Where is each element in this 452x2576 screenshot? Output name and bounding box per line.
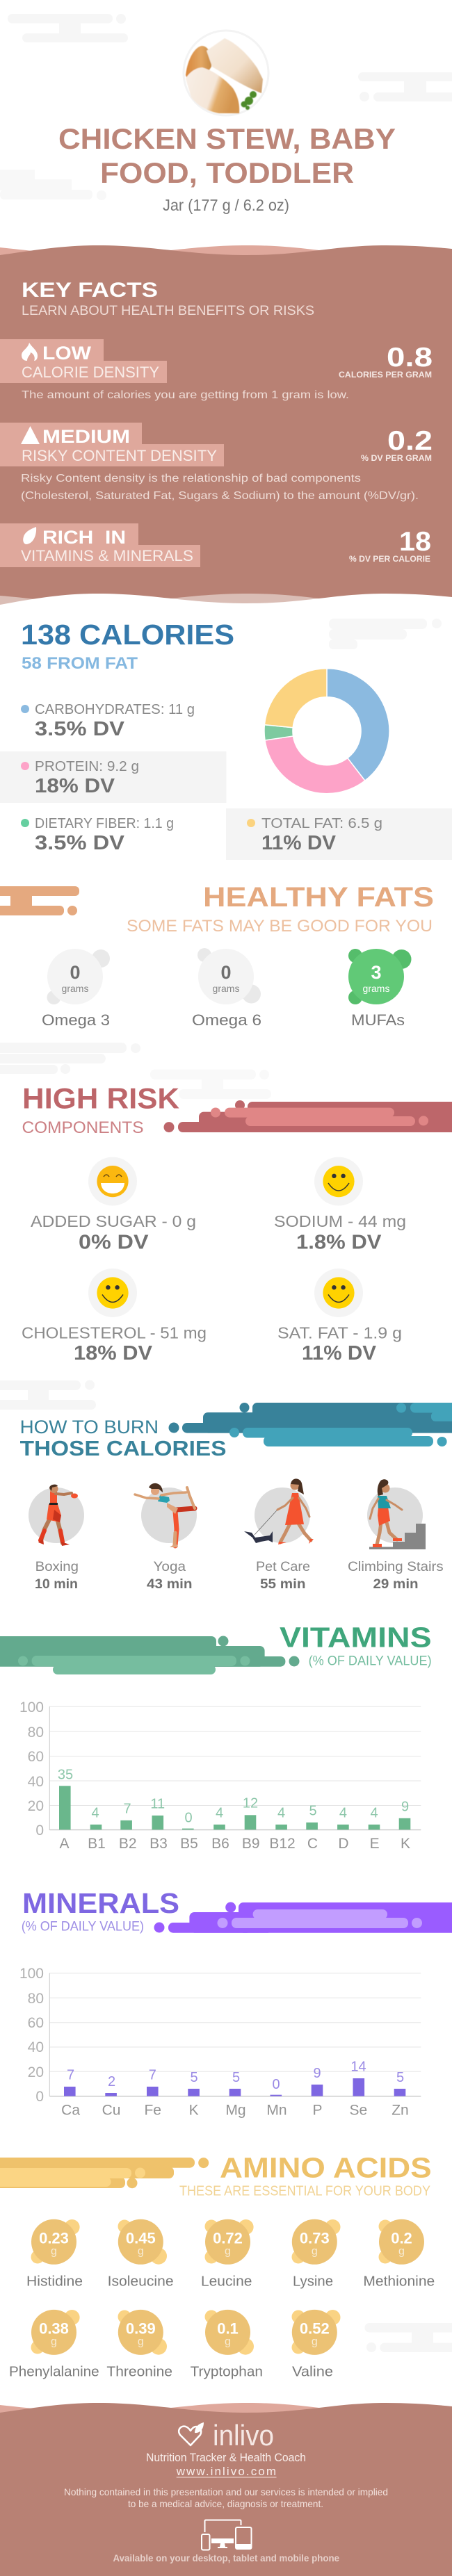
decorative band [168,1403,452,1446]
amino acids heading: AMINO ACIDS [220,2151,432,2183]
bar chart: vitamins: 5 [309,1803,317,1818]
healthy fats subheading: SOME FATS MAY BE GOOD FOR YOU [127,917,433,936]
amino: isoleucine: Isoleucine [108,2274,174,2289]
legend: carbohydrates: 3.5% DV [35,718,125,740]
disclaimer: Nothing contained in this presentation and our services is intended or implied [64,2486,388,2497]
tag: medium risky content density: RISKY CONTENT DENSITY [22,447,217,464]
activity: climbing stairs: Climbing Stairs [348,1560,444,1574]
bar chart: minerals: P [312,2103,323,2119]
stat: dv per calorie: 18 [399,527,431,557]
bar chart: minerals [19,1966,421,2119]
bar chart: minerals: 60 [28,2015,44,2031]
amino: isoleucine: 0.45 [126,2230,156,2247]
bar chart: vitamins: 4 [277,1806,285,1821]
decorative band [154,1902,452,1933]
tag: medium risky content density: MEDIUM [42,426,130,447]
bar chart: minerals: 0 [35,2089,44,2105]
bar chart: minerals: Mn [266,2103,287,2119]
icon: smiling face [97,1277,129,1309]
amino: leucine: 0.72 [213,2230,243,2247]
bar chart: vitamins: B12 [269,1836,296,1852]
title [58,122,396,189]
bar chart: minerals: 0 [272,2077,280,2092]
stat: calories per gram: CALORIES PER GRAM [339,370,432,380]
amino: valine: 0.52 [300,2320,330,2337]
bar chart: vitamins: 11 [150,1796,165,1811]
saturated fat [277,1269,402,1364]
icon: woman climbing stairs [369,1479,426,1549]
tag: rich in vitamins and minerals [0,523,200,567]
low density description: The amount of calories you are getting from 1 gram is low. [22,389,349,401]
bar chart: vitamins: 40 [28,1774,44,1790]
amino: threonine: g [138,2335,144,2347]
icon: yoga figure [135,1483,195,1547]
amino: methionine: g [398,2246,405,2258]
icon: woman walking dog [244,1478,314,1544]
amino: phenylalanine: Phenylalanine [9,2365,99,2380]
disclaimer [64,2486,388,2509]
amino: histidine [26,2219,83,2289]
bar chart: vitamins: 4 [216,1806,223,1821]
decorative band [0,1636,299,1674]
bar chart: vitamins: 80 [28,1725,44,1741]
bar chart: minerals: Se [350,2103,367,2119]
stat: calories per gram: 0.8 [387,343,433,373]
activity: yoga [135,1483,197,1592]
vitamins heading: VITAMINS [280,1621,432,1653]
bar chart: vitamins: C [307,1836,318,1852]
panel: key facts [0,245,452,615]
amino: tryptophan: Tryptophan [191,2365,263,2380]
added sugar: ADDED SUGAR - 0 g [31,1212,196,1230]
amino: leucine: g [225,2246,231,2258]
legend: dietary fiber: DIETARY FIBER: 1.1 g [35,816,174,831]
amino: valine: Valine [292,2365,333,2380]
amino: methionine [363,2219,435,2289]
omega 3: grams [62,983,88,994]
minerals subheading: (% OF DAILY VALUE) [22,1920,144,1934]
bar chart: vitamins: B6 [211,1836,229,1852]
bar chart: minerals: Ca [61,2103,80,2119]
bar chart: vitamins: 4 [339,1806,347,1821]
decorative band [0,886,79,915]
tag: low calorie density: LOW [42,343,92,364]
bar chart: vitamins: 7 [123,1801,131,1816]
website link: www.inlivo.com [176,2465,276,2478]
panel: amino acids [0,2151,435,2380]
sodium: SODIUM - 44 mg [274,1212,406,1230]
icon: smiling face [323,1277,355,1309]
parsley [241,91,257,110]
icon: boxer figure [38,1485,78,1546]
burn heading: HOW TO BURN [20,1417,159,1437]
burn heading: THOSE CALORIES [20,1436,226,1460]
components subheading: COMPONENTS [22,1118,143,1137]
key facts heading: KEY FACTS [22,279,158,302]
disclaimer: to be a medical advice, diagnosis or treatment. [128,2498,323,2509]
icon: leaf [23,527,36,544]
bar chart: vitamins: B9 [242,1836,260,1852]
logo: inlivo: inlivo [213,2419,274,2452]
amino: histidine: Histidine [26,2274,83,2289]
bar chart: minerals: 5 [190,2070,198,2085]
burn heading [20,1417,226,1460]
back chicken piece [186,46,211,81]
bar chart: vitamins: 12 [243,1796,258,1811]
stat: dv per gram: 0.2 [387,426,433,456]
serving size: Jar (177 g / 6.2 oz) [163,196,289,214]
bar chart: minerals: Mg [225,2103,246,2119]
stat: dv per gram: % DV PER GRAM [361,453,432,463]
bar chart: minerals: 100 [19,1966,44,1982]
legend: total fat [226,808,452,860]
bar chart: minerals: 40 [28,2039,44,2055]
amino: tryptophan [191,2310,263,2380]
bar chart: vitamins: 4 [91,1806,99,1821]
risky content description: (Cholesterol, Saturated Fat, Sugars & Sodium) to the amount (%DV/gr). [21,490,419,502]
legend: total fat: TOTAL FAT: 6.5 g [261,816,382,831]
amino: leucine [201,2219,254,2289]
legend: dietary fiber: 3.5% DV [35,832,125,854]
legend: protein [0,751,227,803]
added sugar [31,1157,196,1254]
amino: tryptophan: g [225,2335,231,2347]
amino: isoleucine: g [138,2246,144,2258]
mufas [348,949,412,1029]
amino: threonine [106,2310,172,2380]
omega 6: 0 [220,962,232,983]
stat: dv per gram [361,426,433,463]
amino: histidine: g [51,2246,57,2258]
panel: how to burn those calories [20,1403,452,1592]
sodium: 1.8% DV [296,1232,382,1254]
bar chart: vitamins [19,1699,421,1852]
amino: lysine: g [312,2246,318,2258]
availability note: Available on your desktop, tablet and mobile phone [113,2552,339,2563]
risky content description [21,473,419,502]
cholesterol [22,1269,207,1364]
bar chart: minerals: 5 [232,2070,240,2085]
minerals heading: MINERALS [22,1887,179,1919]
tag: rich in vitamins and minerals: RICH IN [42,527,126,548]
mufas: MUFAs [351,1011,405,1029]
amino: phenylalanine: g [51,2335,57,2347]
tag: low calorie density [0,339,167,383]
activity: yoga: Yoga [153,1560,186,1574]
mufas: 3 [371,962,382,983]
tag: rich in vitamins and minerals: VITAMINS & MINERALS [21,547,193,564]
activity: boxing: Boxing [35,1560,79,1574]
food photo: chicken pieces [184,31,268,115]
omega 6 [192,948,261,1029]
amino: isoleucine [108,2219,174,2289]
title: CHICKEN STEW, BABY [58,122,396,155]
activity: pet care [244,1478,314,1592]
bar chart: vitamins: B1 [88,1836,106,1852]
bar chart: vitamins: 35 [58,1767,73,1782]
saturated fat: SAT. FAT - 1.9 g [277,1323,402,1342]
sodium [274,1157,406,1254]
risky content description: Risky Content density is the relationship of bad components [21,473,361,484]
bar chart: vitamins: 0 [184,1810,193,1825]
bar chart: vitamins: 0 [35,1823,44,1839]
legend: dietary fiber [21,816,174,854]
key facts subheading: LEARN ABOUT HEALTH BENEFITS OR RISKS [22,304,314,318]
panel: healthy fats [0,882,434,1029]
amino: lysine [292,2219,341,2289]
bar chart: minerals: 80 [28,1991,44,2007]
omega 3 [42,949,110,1029]
saturated fat: 11% DV [302,1342,377,1364]
bar chart: minerals: 14 [350,2059,366,2074]
activity: climbing stairs [348,1479,444,1592]
panel: minerals [19,1887,452,2119]
amino: valine: g [312,2335,318,2347]
stat: dv per calorie [349,527,431,564]
bar chart: minerals: 20 [28,2064,44,2080]
activity: boxing [29,1485,84,1592]
stat: dv per calorie: % DV PER CALORIE [349,554,430,564]
panel: vitamins [0,1621,432,1852]
healthy fats heading: HEALTHY FATS [203,882,434,913]
amino: histidine: 0.23 [39,2230,69,2247]
bar chart: vitamins: B2 [119,1836,137,1852]
calories from fat: 58 FROM FAT [22,654,138,673]
amino: lysine: 0.73 [300,2230,330,2247]
activity: climbing stairs: 29 min [373,1577,419,1592]
logo: inlivo [179,2419,274,2452]
donut chart [264,669,389,794]
bar chart: vitamins: 9 [401,1799,409,1814]
stat: calories per gram [339,343,433,380]
amino: leucine: Leucine [201,2274,252,2289]
tag: low calorie density: CALORIE DENSITY [22,364,159,381]
amino: threonine: Threonine [106,2365,172,2380]
calories heading: 138 CALORIES [21,619,234,651]
bar chart: vitamins: A [59,1836,70,1852]
added sugar: 0% DV [79,1232,149,1254]
icon: smiling face [323,1166,355,1197]
panel: calories [0,619,452,860]
bar chart: minerals: 7 [67,2068,74,2083]
bar chart: vitamins: 20 [28,1798,44,1814]
amino: valine [292,2310,341,2380]
cholesterol: 18% DV [74,1342,153,1364]
mufas: grams [363,983,389,994]
decorative band [0,2158,209,2188]
bar chart: minerals: Fe [144,2103,161,2119]
amino: phenylalanine: 0.38 [39,2320,69,2337]
decorative band [164,1100,452,1132]
bar chart: minerals: Zn [392,2103,409,2119]
activity: pet care: Pet Care [256,1560,310,1574]
amino: methionine: 0.2 [391,2230,412,2247]
icon: flame [22,343,38,361]
panel: high risk components [22,1082,452,1364]
bar chart: vitamins: D [338,1836,349,1852]
bar chart: vitamins: E [370,1836,380,1852]
bar chart: minerals: 2 [108,2074,115,2089]
bar chart: minerals: K [189,2103,199,2119]
tagline: Nutrition Tracker & Health Coach [146,2451,306,2464]
title: FOOD, TODDLER [100,156,354,189]
bar chart: minerals: 9 [313,2066,321,2081]
legend: carbohydrates: CARBOHYDRATES: 11 g [35,702,195,717]
legend: protein: PROTEIN: 9.2 g [35,759,139,774]
amino: phenylalanine [9,2310,99,2380]
bar chart: vitamins: B3 [150,1836,168,1852]
legend: protein: 18% DV [35,775,115,797]
activity: yoga: 43 min [147,1577,192,1592]
icon: warning triangle [21,426,40,444]
activity: pet care: 55 min [260,1577,306,1592]
activity: boxing: 10 min [35,1577,78,1592]
bar chart: vitamins: B5 [180,1836,198,1852]
bar chart: vitamins: 4 [370,1806,378,1821]
panel: footer [0,2403,452,2576]
omega 6: grams [213,983,239,994]
bar chart: minerals: 5 [396,2070,404,2085]
bar chart: vitamins: K [401,1836,410,1852]
bar chart: vitamins: 60 [28,1749,44,1765]
bar chart: minerals: 7 [149,2068,156,2083]
lower chicken piece [186,67,239,113]
vitamins subheading: (% OF DAILY VALUE) [309,1654,432,1668]
legend: carbohydrates [21,702,195,740]
tag: medium risky content density [0,423,224,466]
omega 3: Omega 3 [42,1011,110,1029]
cholesterol: CHOLESTEROL - 51 mg [22,1323,207,1342]
amino: threonine: 0.39 [126,2320,156,2337]
omega 3: 0 [70,962,81,983]
amino acids subheading: THESE ARE ESSENTIAL FOR YOUR BODY [179,2184,430,2199]
icon: grinning face [97,1166,129,1197]
omega 6: Omega 6 [192,1011,261,1029]
amino: methionine: Methionine [363,2274,435,2289]
amino: lysine: Lysine [293,2274,333,2289]
icon: devices [202,2520,252,2550]
amino: tryptophan: 0.1 [217,2320,239,2337]
bar chart: minerals: Cu [102,2103,120,2119]
bar chart: vitamins: 100 [19,1699,44,1715]
legend: total fat: 11% DV [261,832,337,854]
high risk heading: HIGH RISK [22,1082,179,1115]
upper chicken piece [207,38,263,93]
